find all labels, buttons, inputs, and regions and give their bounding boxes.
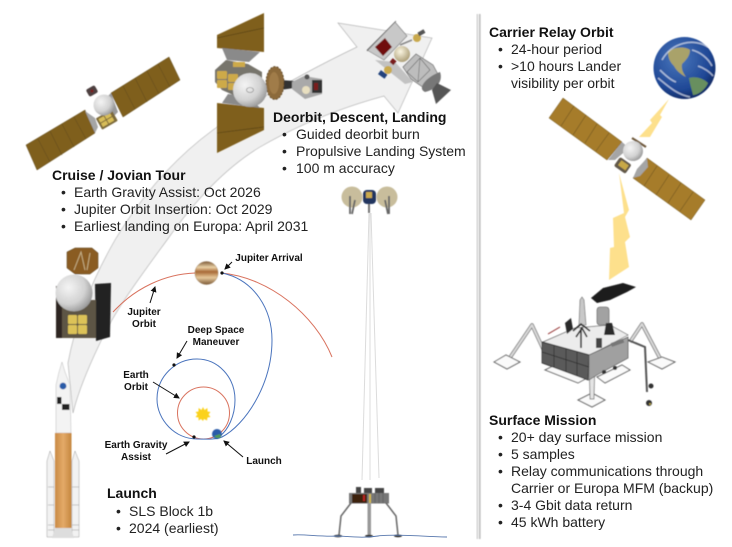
diagram labels: Earth Gravity: [105, 440, 168, 451]
heading and list: surface mission: 45 kWh battery: [511, 514, 605, 530]
heading and list: surface mission: •: [498, 463, 503, 479]
heading and list: cruise and Jovian tour: [52, 167, 308, 234]
spacecraft: lander and descent stage: [56, 248, 111, 341]
heading and list: deorbit, descent, landing: •: [282, 126, 287, 142]
heading and list: carrier relay orbit: visibility per orbit: [511, 75, 615, 91]
heading and list: launch: Launch: [107, 485, 157, 501]
diagram labels: Earth: [123, 370, 149, 381]
heading and list: carrier relay orbit: >10 hours Lander: [511, 58, 621, 74]
Sun: [196, 407, 210, 421]
lander legs: [507, 324, 662, 362]
heading and list: cruise and Jovian tour: •: [61, 218, 66, 234]
robotic arm: [628, 340, 647, 392]
heading and list: surface mission: Surface Mission: [489, 412, 596, 428]
heading and list: carrier relay orbit: •: [498, 58, 503, 74]
icon: Earth: [654, 37, 716, 99]
heading and list: surface mission: 5 samples: [511, 446, 575, 462]
heading and list: cruise and Jovian tour: Jupiter Orbit Insertion: Oct 2029: [74, 201, 273, 217]
mission trajectory arrow: [68, 23, 432, 413]
spacecraft: approach stack: [215, 13, 322, 153]
lightning bolt: Earth link: [639, 99, 669, 137]
heading and list: launch: SLS Block 1b: [129, 503, 213, 519]
heading and list: launch: •: [116, 520, 121, 536]
diagram labels: Orbit: [124, 382, 149, 393]
diagram labels: Jupiter: [127, 307, 161, 318]
lander on surface: [334, 487, 402, 537]
trajectory markers: [172, 271, 224, 439]
diagram labels: Assist: [121, 452, 152, 463]
spacecraft: carrier in relay orbit: [549, 98, 705, 220]
heading and list: surface mission: 3-4 Gbit data return: [511, 497, 632, 513]
Jupiter orbit: [113, 273, 332, 357]
heading and list: surface mission: Carrier or Europa MFM (backup): [511, 480, 713, 496]
heading and list: cruise and Jovian tour: •: [61, 184, 66, 200]
heading and list: carrier relay orbit: [489, 24, 621, 91]
spacecraft: deorbit stage: [367, 21, 451, 104]
heading and list: surface mission: •: [498, 497, 503, 513]
heading and list: deorbit, descent, landing: 100 m accuracy: [296, 160, 395, 176]
lightning bolt: lander link: [609, 173, 630, 280]
heading and list: deorbit, descent, landing: Guided deorbit burn: [296, 126, 420, 142]
front leg: [589, 351, 595, 399]
avionics side panel: [589, 337, 628, 380]
transfer trajectory: [157, 273, 272, 439]
heading and list: surface mission: •: [498, 514, 503, 530]
heading and list: cruise and Jovian tour: Earth Gravity Assist: Oct 2026: [74, 184, 261, 200]
diagram labels: Maneuver: [193, 337, 239, 348]
Earth orbit: [178, 387, 230, 439]
lander deck: [543, 325, 628, 355]
heading and list: deorbit, descent, landing: •: [282, 143, 287, 159]
heading and list: cruise and Jovian tour: •: [61, 201, 66, 217]
heading and list: launch: •: [116, 503, 121, 519]
heading and list: surface mission: •: [498, 429, 503, 445]
leader arrows: [150, 262, 243, 457]
heading and list: surface mission: [489, 412, 713, 530]
heading and list: deorbit, descent, landing: Propulsive Landing System: [296, 143, 466, 159]
heading and list: deorbit, descent, landing: Deorbit, Descent, Landing: [273, 109, 446, 125]
Earth in diagram: [212, 429, 222, 439]
heading and list: cruise and Jovian tour: Cruise / Jovian Tour: [52, 167, 186, 183]
heading and list: launch: 2024 (earliest): [129, 520, 218, 536]
heading and list: cruise and Jovian tour: Earliest landing on Europa: April 2031: [74, 218, 308, 234]
diagram labels: Jupiter Arrival: [235, 253, 303, 264]
diagram labels: Deep Space: [188, 325, 245, 336]
diagram labels: Launch: [246, 456, 282, 467]
lander pads: [494, 355, 675, 407]
mast and instruments: [579, 297, 586, 325]
heading and list: carrier relay orbit: •: [498, 41, 503, 57]
heading and list: deorbit, descent, landing: •: [282, 160, 287, 176]
descent tethers: [362, 213, 379, 480]
spacecraft: cruise configuration: [26, 57, 180, 170]
battery block: [542, 342, 589, 380]
heading and list: carrier relay orbit: Carrier Relay Orbit: [489, 24, 614, 40]
heading and list: surface mission: 20+ day surface mission: [511, 429, 662, 445]
heading and list: launch: [107, 485, 218, 536]
heading and list: deorbit, descent, landing: [273, 109, 466, 176]
diagram labels: Orbit: [132, 319, 157, 330]
divider line: [476, 14, 481, 539]
descent stage with parachutes: [342, 186, 398, 214]
heading and list: surface mission: Relay communications through: [511, 463, 703, 479]
Jupiter: [195, 262, 218, 284]
rocket: SLS Block 1b: [47, 362, 79, 538]
heading and list: carrier relay orbit: 24-hour period: [511, 41, 602, 57]
diagram labels: [105, 253, 303, 467]
heading and list: surface mission: •: [498, 446, 503, 462]
high gain antenna: [591, 283, 636, 303]
trajectory diagram: [105, 253, 332, 467]
Europa lander: [494, 283, 675, 407]
Europa surface line: [293, 535, 447, 537]
